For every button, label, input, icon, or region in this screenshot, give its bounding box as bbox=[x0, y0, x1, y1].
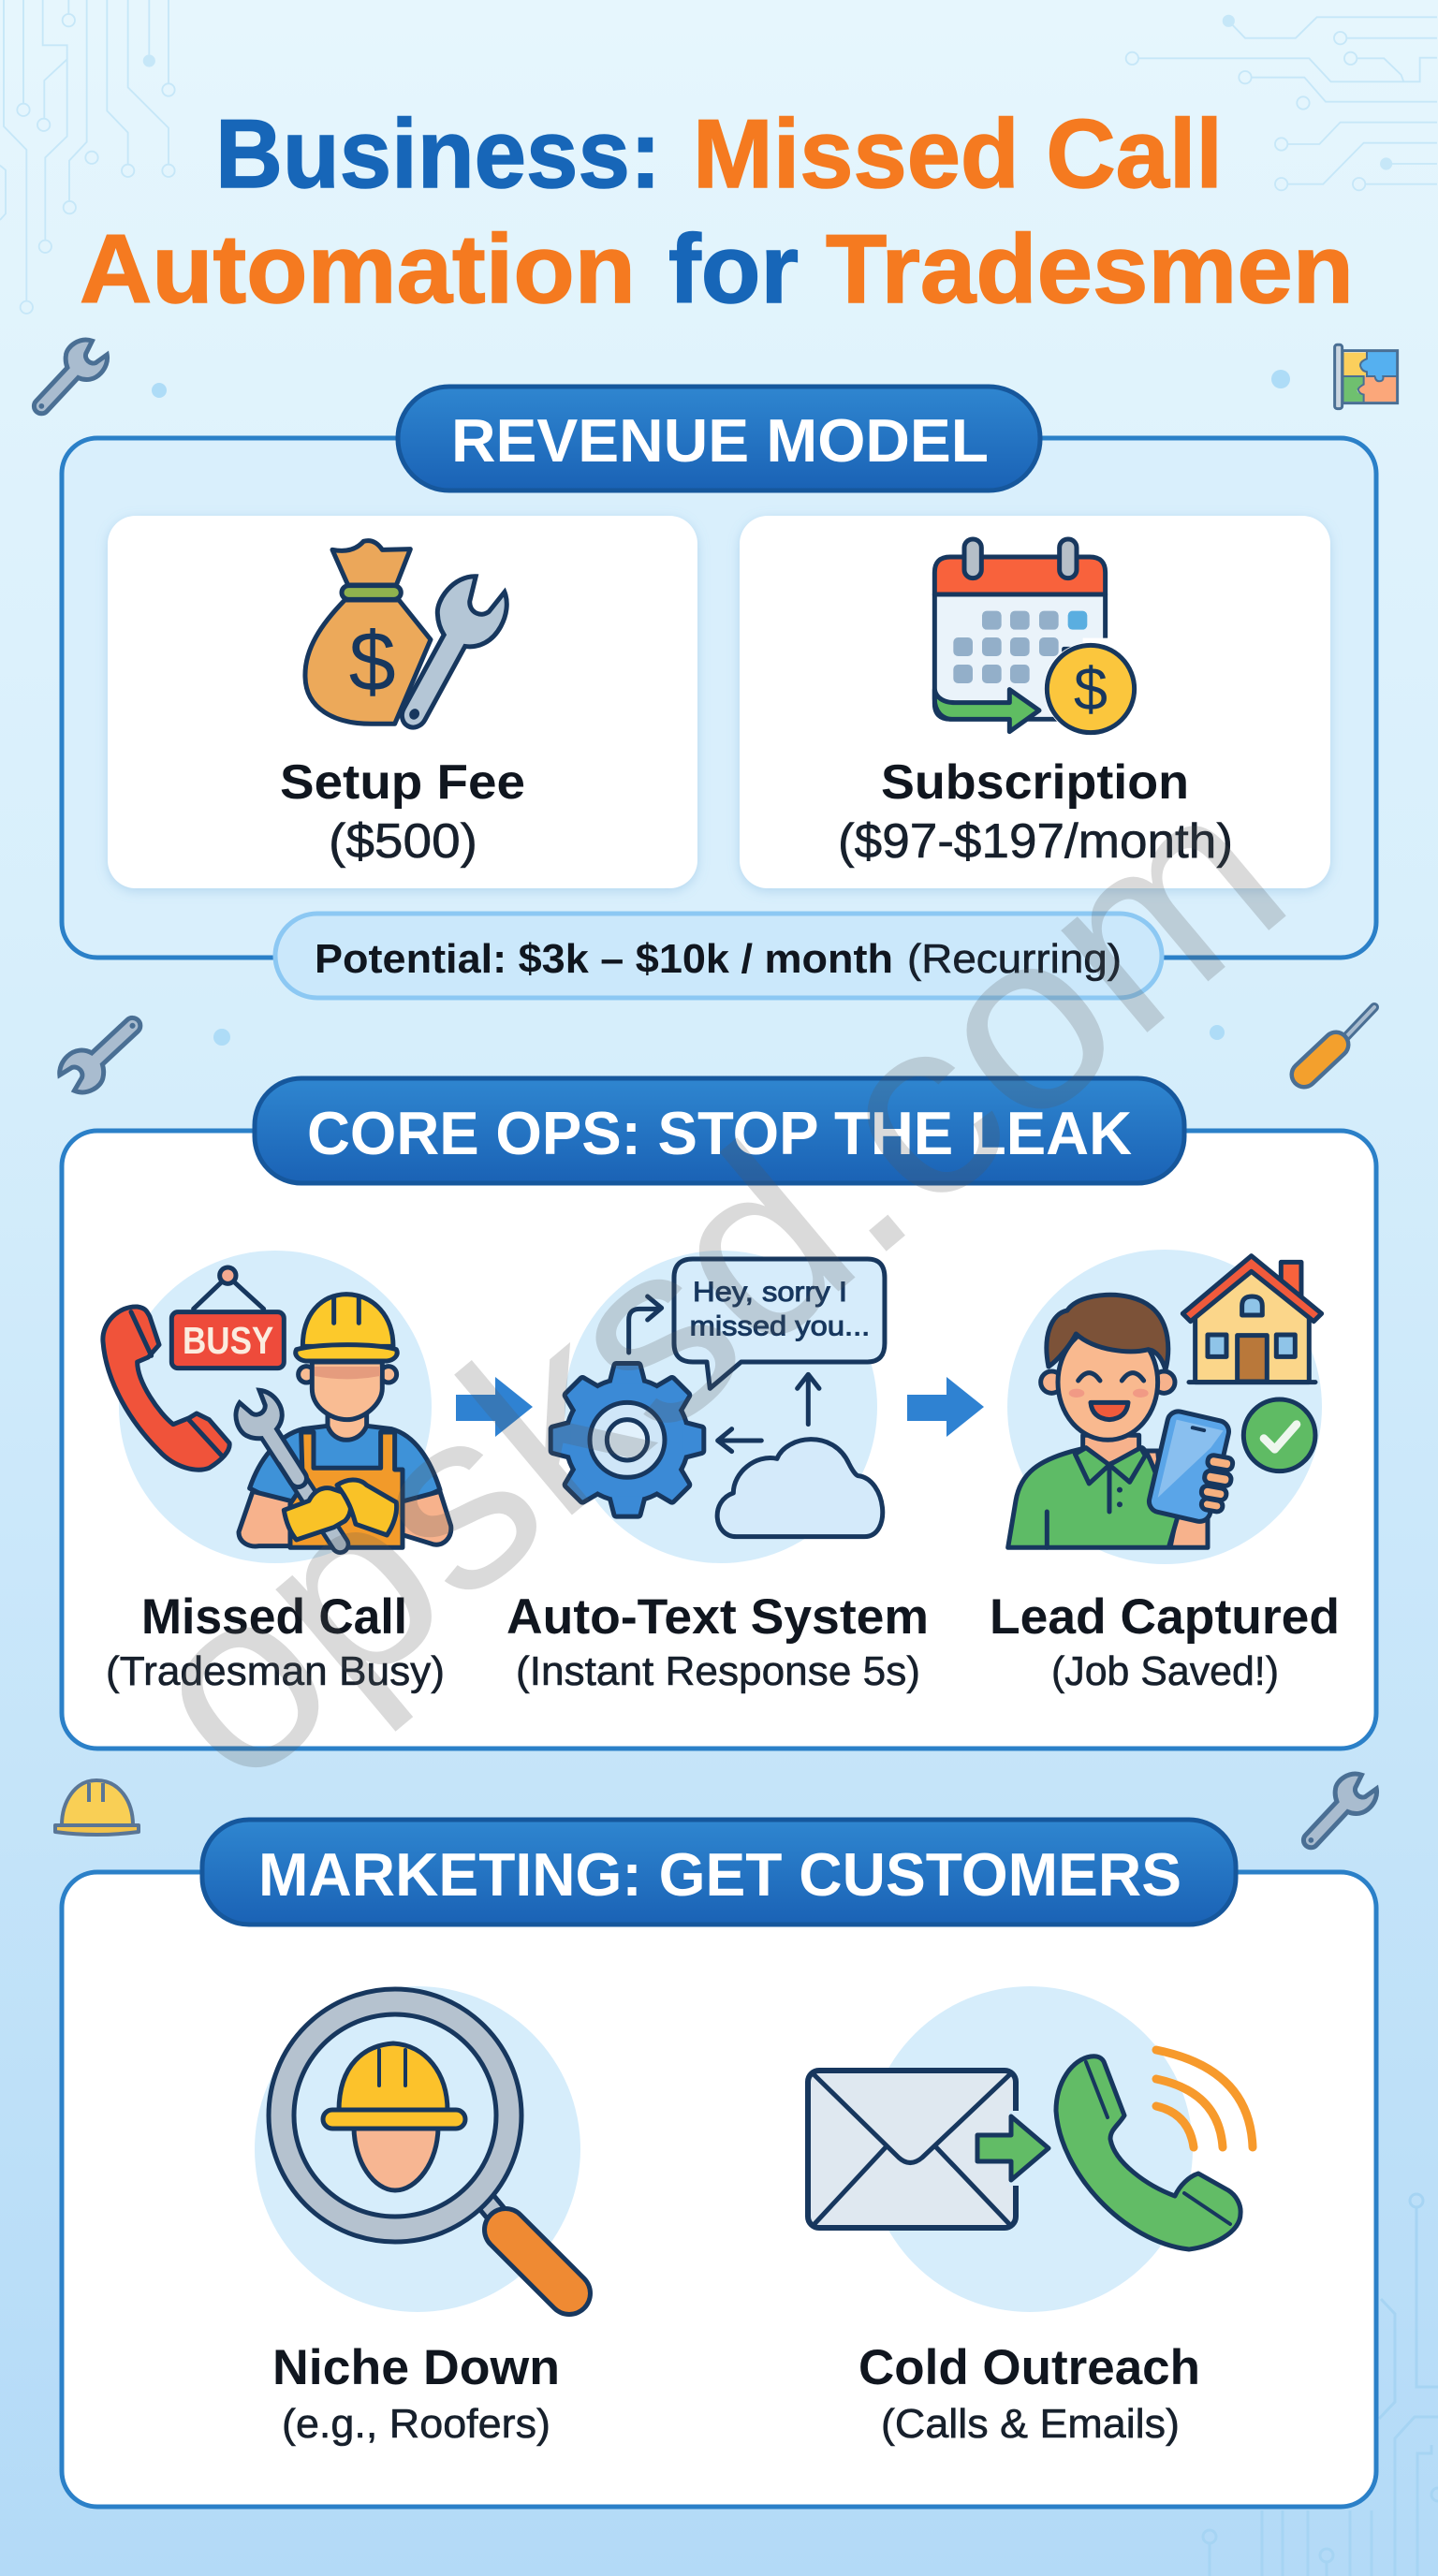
icon: money bag and wrench: $ bbox=[349, 616, 396, 710]
icon: screwdriver bbox=[1304, 1007, 1374, 1075]
icon circle bbox=[255, 1986, 580, 2312]
circuit pattern: top right bbox=[1126, 16, 1437, 190]
decorative dots bbox=[152, 370, 1290, 1046]
icon: calendar and coin: $ bbox=[1074, 655, 1108, 724]
icon circle bbox=[565, 1251, 877, 1563]
heading: revenue model bbox=[398, 387, 1040, 490]
arrow: step 2 to 3 bbox=[907, 1377, 984, 1437]
text: setup price: ($500) bbox=[329, 814, 477, 869]
icon: calendar and coin bbox=[934, 539, 1137, 736]
sublabel: instant response: (Instant Response 5s) bbox=[516, 1648, 920, 1694]
callout: potential: (Recurring) bbox=[907, 936, 1122, 982]
panel: core ops bbox=[62, 1078, 1376, 1749]
label: niche down: Niche Down bbox=[272, 2340, 560, 2395]
icon: puzzle flag bbox=[1335, 344, 1398, 409]
heading: core ops bbox=[255, 1078, 1184, 1183]
label: lead captured: Lead Captured bbox=[990, 1589, 1340, 1645]
heading: core ops: CORE OPS: STOP THE LEAK bbox=[307, 1099, 1132, 1167]
icon: hard hat bbox=[55, 1780, 139, 1835]
item: cold outreach bbox=[808, 1986, 1253, 2447]
icon: envelope and phone bbox=[808, 2050, 1253, 2249]
card: setup fee bbox=[108, 516, 697, 888]
heading: marketing: MARKETING: GET CUSTOMERS bbox=[258, 1840, 1181, 1909]
text: subscription price: ($97-$197/month) bbox=[838, 814, 1233, 869]
icon: wrench top left bbox=[22, 332, 113, 426]
label: missed call: Missed Call bbox=[141, 1589, 407, 1645]
panel: revenue model bbox=[62, 387, 1376, 998]
title: Automation bbox=[80, 215, 636, 324]
step: lead captured bbox=[990, 1250, 1340, 1694]
text: subscription: Subscription bbox=[881, 755, 1189, 810]
step: missed call bbox=[103, 1251, 451, 1694]
sublabel: job saved: (Job Saved!) bbox=[1051, 1648, 1279, 1694]
label: auto-text system: Auto-Text System bbox=[506, 1589, 929, 1645]
icon: phone, busy sign and worker: BUSY bbox=[183, 1319, 273, 1362]
callout: potential bbox=[275, 914, 1162, 998]
icon: wrench lower right bbox=[1292, 1766, 1383, 1860]
icon: phone, busy sign and worker bbox=[103, 1267, 451, 1547]
icon: gear, chat bubble and cloud bbox=[553, 1259, 885, 1537]
icon circle bbox=[867, 1986, 1193, 2312]
card: subscription bbox=[740, 516, 1330, 888]
icon: gear, chat bubble and cloud: Hey, sorry I bbox=[693, 1277, 847, 1308]
panel frame bbox=[62, 438, 1376, 958]
item: niche down bbox=[255, 1986, 580, 2447]
sublabel: tradesman busy: (Tradesman Busy) bbox=[106, 1648, 445, 1694]
title: Tradesmen bbox=[826, 215, 1354, 324]
title: Business: bbox=[215, 100, 661, 209]
icon: gear, chat bubble and cloud: missed you... bbox=[690, 1311, 870, 1342]
icon: magnifier with worker bbox=[269, 1989, 569, 2293]
heading: revenue model: REVENUE MODEL bbox=[451, 406, 989, 475]
sublabel: roofers: (e.g., Roofers) bbox=[282, 2401, 550, 2447]
panel: marketing bbox=[62, 1820, 1376, 2507]
sublabel: calls and emails: (Calls & Emails) bbox=[881, 2401, 1180, 2447]
panel frame bbox=[62, 1872, 1376, 2507]
icon: wrench middle left bbox=[54, 1004, 153, 1100]
watermark: opsksd.com bbox=[92, 731, 1335, 1837]
arrow: step 1 to 2 bbox=[456, 1377, 533, 1437]
title: Missed Call bbox=[693, 100, 1223, 209]
title: for bbox=[668, 215, 799, 324]
icon: happy customer, house and check bbox=[1008, 1256, 1322, 1547]
panel frame bbox=[62, 1131, 1376, 1749]
icon circle bbox=[1007, 1250, 1322, 1564]
step: auto-text system bbox=[506, 1251, 929, 1694]
circuit pattern: bottom right bbox=[1203, 2194, 1438, 2576]
icon circle bbox=[119, 1251, 432, 1563]
icon: money bag and wrench bbox=[305, 541, 516, 742]
circuit pattern: top left bbox=[0, 0, 175, 314]
heading: marketing bbox=[202, 1820, 1236, 1925]
callout: potential: Potential: $3k – $10k / month bbox=[315, 936, 893, 982]
label: cold outreach: Cold Outreach bbox=[858, 2340, 1200, 2395]
text: setup fee: Setup Fee bbox=[280, 755, 525, 810]
title bbox=[80, 100, 1354, 324]
